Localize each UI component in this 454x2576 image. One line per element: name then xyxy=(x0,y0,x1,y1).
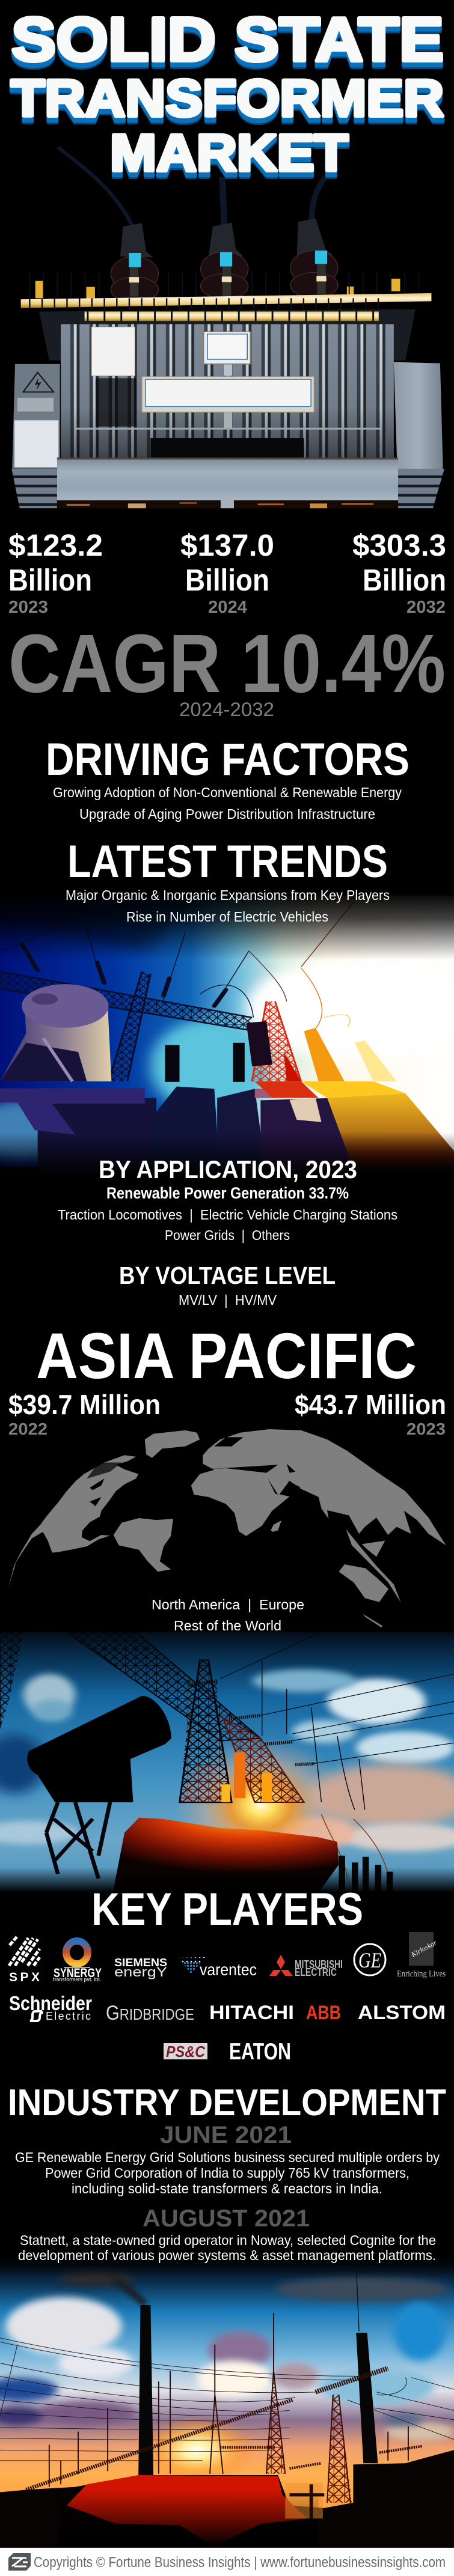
latest trends list xyxy=(66,887,390,925)
logo: Varentec: varentec xyxy=(200,1960,257,1979)
other regions: Rest of the World xyxy=(174,1618,281,1633)
logo: Synergy: SYNERGY xyxy=(54,1966,102,1980)
ties on pipes xyxy=(29,304,382,316)
asia pacific 2023 value xyxy=(295,1389,446,1438)
market value 2024 xyxy=(180,528,274,617)
latest trends list: Rise in Number of Electric Vehicles xyxy=(126,909,328,925)
clouds xyxy=(0,1669,454,1851)
voltage segments: MV/LV | HV/MV xyxy=(179,1292,277,1308)
hero image: transformer xyxy=(11,147,444,508)
sky xyxy=(0,1632,454,1892)
logo: Mitsubishi Electric: MITSUBISHI xyxy=(295,1958,343,1970)
market value 2032: Billion xyxy=(363,563,446,597)
logo: Schneider Electric xyxy=(9,1992,92,2022)
key players heading: KEY PLAYERS xyxy=(91,1884,363,1935)
sun glow xyxy=(174,1736,348,1874)
sky xyxy=(0,896,454,1167)
market value 2024: $137.0 xyxy=(180,528,274,562)
logo: GE: GE xyxy=(358,1948,381,1972)
logo: SPX: SPX xyxy=(9,1970,40,1984)
cylindrical tank xyxy=(0,984,111,1081)
footer logo xyxy=(8,2553,31,2571)
insulator discs xyxy=(111,251,338,302)
tower silhouettes right xyxy=(339,1856,393,1895)
application segments: Traction Locomotives | Electric Vehicle Charging Stations xyxy=(58,1207,397,1223)
title: TRANSFORMER xyxy=(11,70,444,127)
lit substation gap xyxy=(285,2483,324,2518)
other regions: North America | Europe xyxy=(152,1597,304,1612)
inland water xyxy=(87,1437,301,1506)
market value 2032: 2032 xyxy=(406,598,446,617)
fade to black bottom xyxy=(0,1132,454,1176)
sun xyxy=(139,2416,255,2484)
market value 2024: 2024 xyxy=(208,598,247,617)
red tower xyxy=(252,1001,301,1081)
lower structure left xyxy=(0,1089,156,1176)
gantries xyxy=(26,2368,423,2489)
august 2021 text: development of various power systems & asset management platforms. xyxy=(18,2247,436,2263)
lattice towers xyxy=(0,1632,260,1802)
new zealand xyxy=(363,1614,382,1627)
bushings xyxy=(120,219,333,258)
market value 2023 xyxy=(8,528,103,617)
logo: Varentec xyxy=(177,1957,257,1979)
asia pacific 2022 value: $39.7 Million xyxy=(8,1389,161,1420)
market value 2032 xyxy=(352,528,446,617)
coils xyxy=(129,264,327,297)
north america xyxy=(8,1455,138,1587)
logo: Siemens Energy: SIEMENS xyxy=(114,1957,167,1969)
june 2021 heading: JUNE 2021 xyxy=(160,2122,292,2148)
wires xyxy=(220,1632,454,1879)
logo: Schneider Electric: Schneider xyxy=(9,1992,92,2014)
logo: Alstom: ALSTOM xyxy=(358,2002,446,2023)
transmission wires xyxy=(0,902,353,1031)
logo: GridBridge: GRIDBRIDGE xyxy=(106,2002,194,2025)
application leading segment: Renewable Power Generation 33.7% xyxy=(106,1184,349,1202)
logo: ABB: ABB xyxy=(306,2002,341,2023)
logo: Kirloskar xyxy=(397,1932,446,1979)
fade to black top xyxy=(0,891,454,960)
truss xyxy=(0,971,252,1030)
asia pacific 2023 value: 2023 xyxy=(406,1420,446,1438)
latest trends heading: LATEST TRENDS xyxy=(67,836,388,887)
by application heading: BY APPLICATION, 2023 xyxy=(99,1155,357,1183)
logo: Siemens Energy xyxy=(114,1957,167,1979)
yellow caps xyxy=(35,279,400,301)
asia pacific 2022 value: 2022 xyxy=(8,1420,48,1438)
madagascar xyxy=(271,1520,281,1532)
logo: Hitachi: HITACHI xyxy=(209,2002,294,2023)
australia xyxy=(339,1564,388,1602)
black transformer cylinder xyxy=(27,1696,171,1802)
june 2021 text xyxy=(15,2149,440,2196)
june 2021 text: Power Grid Corporation of India to supply 765 kV transformers, xyxy=(45,2165,410,2181)
upper insulators xyxy=(22,944,226,1006)
left box xyxy=(12,364,60,469)
logo: Synergy xyxy=(53,1941,102,1982)
rail xyxy=(75,428,382,430)
lower slats xyxy=(11,469,444,508)
august 2021 text xyxy=(18,2232,436,2263)
title: MARKET xyxy=(110,124,348,182)
right panel xyxy=(394,362,443,469)
chimney smoke xyxy=(110,2276,148,2306)
sky xyxy=(0,2252,454,2548)
driving factors list: Upgrade of Aging Power Distribution Infrastructure xyxy=(79,806,375,822)
august 2021 heading: AUGUST 2021 xyxy=(143,2205,310,2232)
logo: Schneider Electric: Electric xyxy=(46,2010,91,2022)
pipes xyxy=(21,293,431,321)
photo: power lines at dusk xyxy=(0,1632,454,1901)
photo: power plant at sunset xyxy=(0,2252,454,2548)
photo: substation at sunrise xyxy=(0,891,454,1176)
lower lattice left xyxy=(46,1802,110,1879)
market value 2023: 2023 xyxy=(8,598,48,617)
logo: Eaton: EATON xyxy=(229,2039,291,2065)
globe map xyxy=(8,1429,446,1627)
other regions xyxy=(152,1597,304,1633)
top fade xyxy=(0,2252,454,2279)
driving factors list xyxy=(53,785,402,822)
logo: PS&C: PS&C xyxy=(166,2043,206,2061)
market value 2024: Billion xyxy=(185,563,269,597)
logo: Kirloskar: Enriching Lives xyxy=(397,1969,446,1979)
driving factors list: Growing Adoption of Non-Conventional & Renewable Energy xyxy=(53,785,402,800)
application segments xyxy=(58,1207,397,1243)
clouds xyxy=(0,2271,454,2441)
logo: Mitsubishi Electric: ELECTRIC xyxy=(295,1966,337,1978)
logo: SPX xyxy=(9,1937,40,1984)
footer xyxy=(0,2548,454,2576)
nameplates xyxy=(91,327,314,428)
june 2021 text: including solid-state transformers & reactors in India. xyxy=(72,2181,382,2196)
asia pacific heading: ASIA PACIFIC xyxy=(36,1319,417,1392)
chimneys xyxy=(138,2263,378,2476)
logo: Siemens Energy: energY xyxy=(114,1964,167,1979)
silhouettes of insulators xyxy=(165,1021,397,1082)
lattice tower xyxy=(109,971,150,1081)
central america and south america xyxy=(114,1518,173,1572)
title: SOLID STATE xyxy=(11,5,444,74)
dark ground xyxy=(0,2450,454,2548)
asia pacific 2022 value xyxy=(8,1389,161,1438)
market value 2032: $303.3 xyxy=(352,528,446,562)
black fade xyxy=(0,1867,454,1892)
title xyxy=(11,5,444,182)
insulator strings xyxy=(188,1681,314,1765)
red ground glow xyxy=(67,2475,307,2546)
top frame xyxy=(39,309,416,360)
logo: Synergy: transformers pvt. ltd. xyxy=(53,1976,101,1982)
glow falloff xyxy=(58,2489,319,2546)
tank body with fins xyxy=(61,324,394,462)
base band xyxy=(57,458,398,508)
logo: Kirloskar: Kirloskar xyxy=(409,1938,438,1959)
by voltage heading: BY VOLTAGE LEVEL xyxy=(119,1262,336,1289)
greenland and arctic xyxy=(145,1430,200,1458)
latest trends list: Major Organic & Inorganic Expansions from Key Players xyxy=(66,887,390,903)
red mound xyxy=(113,1818,339,1892)
cable ties xyxy=(29,252,431,318)
august 2021 text: Statnett, a state-owned grid operator in Noway, selected Cognite for the xyxy=(20,2232,436,2248)
logo: Mitsubishi Electric xyxy=(269,1955,343,1978)
wires xyxy=(0,2338,454,2461)
logo: GE xyxy=(354,1944,385,1975)
CAGR period: 2024-2032 xyxy=(179,699,274,720)
red tower lower xyxy=(180,1718,304,1802)
application segments: Power Grids | Others xyxy=(165,1227,290,1243)
pylons xyxy=(49,2313,408,2503)
market value 2023: Billion xyxy=(8,563,92,597)
cyan terminals xyxy=(129,251,327,267)
dark steel blocks xyxy=(145,1081,454,1176)
bright insulators xyxy=(221,1752,272,1802)
market value 2023: $123.2 xyxy=(8,528,103,562)
lattice pylons xyxy=(266,2374,352,2503)
cables xyxy=(58,147,326,228)
indonesia xyxy=(346,1529,401,1603)
driving factors heading: DRIVING FACTORS xyxy=(46,734,410,785)
eurasia and africa xyxy=(191,1429,446,1545)
